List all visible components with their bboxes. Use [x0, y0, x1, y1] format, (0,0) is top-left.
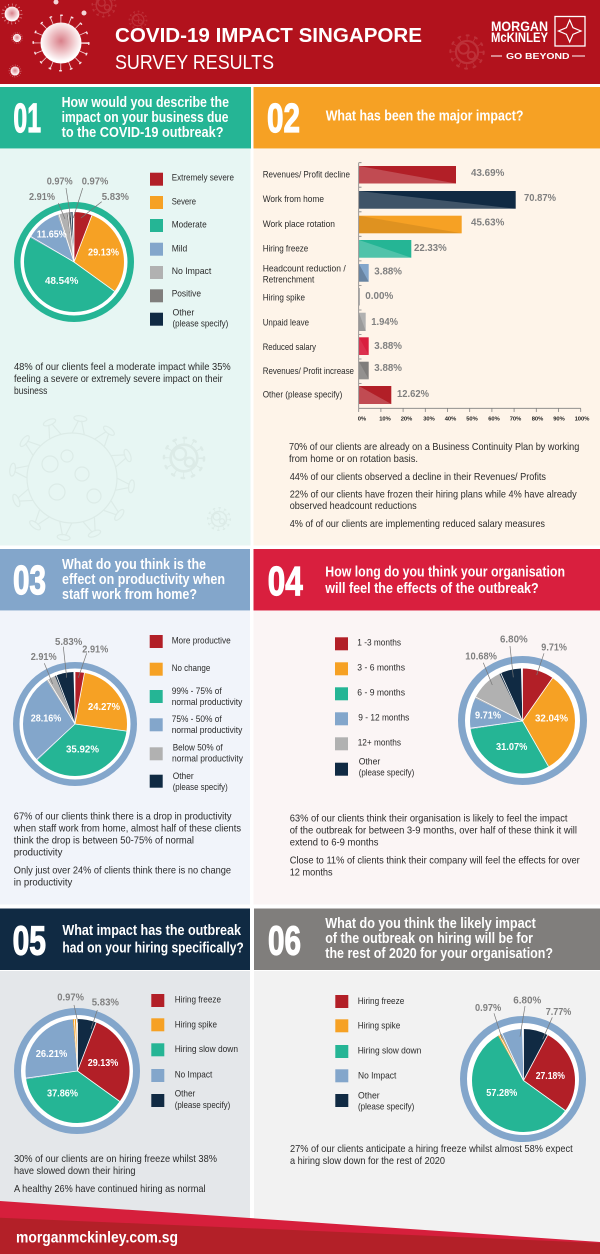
legend 05: Other — [175, 1089, 195, 1099]
axis labels: 10% — [379, 417, 391, 423]
heading bar 04: How long do you think your organisation — [325, 565, 565, 581]
axis labels: 60% — [488, 417, 500, 423]
axis labels: 90% — [553, 417, 565, 423]
legend 04: Other — [359, 756, 380, 766]
pie chart 04: 6.80% — [500, 635, 528, 646]
text block 01: feeling a severe or extremely severe impact on their — [14, 374, 223, 385]
text block 04: 12 months — [290, 868, 333, 879]
icon: dot virus right — [82, 10, 86, 16]
legend 04 — [335, 637, 414, 778]
heading bar 04 — [254, 549, 600, 610]
pie chart 04 — [462, 635, 584, 782]
axis labels: 80% — [532, 417, 543, 423]
heading bar 05: 05 — [13, 917, 46, 963]
text block 06: a hiring slow down for the rest of 2020 — [290, 1156, 445, 1167]
axis labels: 0% — [358, 417, 366, 423]
footer band — [0, 1201, 600, 1254]
pie chart 06: 27.18% — [536, 1071, 565, 1082]
category labels: Unpaid leave — [263, 318, 309, 328]
pie chart 03: 35.92% — [66, 745, 99, 756]
value labels: 3.88% — [374, 267, 402, 278]
heading bar 06: 06 — [268, 917, 301, 963]
bar chart 02 — [263, 163, 589, 423]
pie chart 05: 29.13% — [88, 1058, 118, 1069]
legend 01: Mild — [172, 243, 187, 253]
legend 03: (please specify) — [173, 782, 228, 792]
text block 04: Close to 11% of clients think their company will feel the effects for over — [290, 856, 580, 867]
heading bar 01: impact on your business due — [62, 110, 228, 126]
category labels: Revenues/ Profit decline — [263, 169, 350, 179]
legend 03: normal productivity — [172, 754, 243, 764]
legend 05: (please specify) — [175, 1100, 230, 1110]
value labels: 45.63% — [471, 218, 504, 229]
pie chart 05: 5.83% — [92, 998, 119, 1009]
text block 03: 67% of our clients think there is a drop in productivity — [14, 811, 232, 822]
legend 03: 75% - 50% of — [172, 714, 222, 724]
pie chart 06: 6.80% — [513, 995, 541, 1006]
category labels: Work from home — [263, 194, 324, 204]
text block 02: 44% of our clients observed a decline in their Revenues/ Profits — [290, 472, 546, 483]
pie chart 05: 0.97% — [57, 993, 84, 1004]
pie chart 01: 29.13% — [88, 248, 119, 259]
text block 06: 27% of our clients anticipate a hiring freeze whilst almost 58% expect — [290, 1144, 573, 1155]
text block 02: from home or on rotation basis. — [289, 454, 418, 465]
axis labels: 100% — [575, 417, 589, 423]
legend 05 — [151, 994, 238, 1110]
pie chart 06: 7.77% — [546, 1007, 571, 1018]
logo: Morgan McKinley: GO BEYOND — [506, 52, 570, 61]
legend 03: 99% - 75% of — [172, 686, 222, 696]
pie chart 01: 48.54% — [45, 276, 78, 287]
heading bar 02: 02 — [267, 95, 300, 141]
axis labels: 30% — [423, 417, 435, 423]
text block 02: 22% of our clients have frozen their hiring plans while 4% have already — [290, 489, 578, 500]
value labels: 43.69% — [471, 168, 504, 179]
text block 01 — [14, 362, 231, 397]
heading bar 02: What has been the major impact? — [326, 109, 524, 125]
pie chart 01: 5.83% — [102, 192, 129, 203]
text block 05: 30% of our clients are on hiring freeze whilst 38% — [14, 1154, 217, 1165]
legend 01: Moderate — [172, 220, 207, 230]
heading bar 06: the rest of 2020 for your organisation? — [325, 946, 553, 962]
pie chart 01: 2.91% — [29, 192, 55, 203]
legend 01: Extremely severe — [172, 173, 234, 183]
heading bar 05 — [0, 908, 250, 970]
text block 01: 48% of our clients feel a moderate impact while 35% — [14, 362, 231, 373]
value labels: 3.88% — [374, 341, 402, 352]
heading bar 03: What do you think is the — [62, 557, 206, 573]
text block 03: when staff work from home, almost half of these clients — [13, 823, 241, 834]
logo: Morgan McKinley: McKINLEY — [491, 29, 549, 45]
pie chart 01 — [17, 177, 131, 319]
axis labels — [358, 417, 589, 423]
pie chart 03: 2.91% — [31, 652, 57, 663]
pie chart 03: 24.27% — [88, 702, 120, 713]
heading bar 01 — [0, 87, 251, 148]
text block 03: productivity — [14, 848, 63, 859]
heading bar 01: How would you describe the — [62, 95, 229, 111]
header banner — [0, 0, 600, 84]
value labels: 22.33% — [414, 243, 447, 254]
legend 05: Hiring freeze — [175, 995, 221, 1005]
legend 04: 9 - 12 months — [358, 713, 410, 723]
icon: dot virus top — [54, 0, 58, 4]
legend 04: 3 - 6 months — [357, 663, 405, 673]
pie chart 01: 11.65% — [37, 229, 67, 240]
heading bar 06: of the outbreak on hiring will be for — [325, 931, 533, 947]
category labels: Headcount reduction / — [263, 264, 346, 274]
legend 04: 6 - 9 months — [357, 688, 405, 698]
category labels: Other (please specify) — [263, 390, 342, 400]
category labels — [263, 169, 354, 400]
icon: faint virus top — [92, 0, 116, 17]
legend 05: Hiring spike — [175, 1019, 217, 1029]
legend 03: Below 50% of — [173, 743, 223, 753]
legend 06: Hiring slow down — [358, 1045, 421, 1055]
value labels: 70.87% — [524, 193, 556, 204]
text block 03: think the drop is between 50-75% of normal — [14, 835, 194, 846]
title: COVID-19 IMPACT SINGAPORE — [115, 25, 422, 47]
heading bar 03 — [0, 549, 250, 610]
legend 03: Other — [173, 771, 194, 781]
heading bar 06: What do you think the likely impact — [325, 916, 536, 932]
pie chart 04: 10.68% — [465, 651, 497, 662]
text block 02: observed headcount reductions — [290, 501, 417, 512]
legend 06 — [335, 995, 421, 1111]
category labels: Reduced salary — [263, 342, 316, 352]
pie chart 03 — [16, 637, 134, 783]
heading bar 01: to the COVID-19 outbreak? — [62, 125, 223, 141]
text block 05: have slowed down their hiring — [14, 1166, 136, 1177]
legend 01 — [150, 173, 234, 329]
text block 05 — [14, 1154, 217, 1195]
legend 06: (please specify) — [358, 1101, 414, 1111]
axis labels: 50% — [466, 417, 478, 423]
legend 03 — [150, 635, 243, 792]
text block 03: Only just over 24% of clients think there is no change — [14, 866, 231, 877]
category labels: Work place rotation — [263, 219, 335, 229]
text block 04: of the outbreak for between 3-9 months, over half of these think it will — [290, 826, 577, 837]
heading bar 04: 04 — [268, 558, 303, 604]
heading bar 05: had on your hiring specifically? — [62, 940, 244, 956]
legend 05: Hiring slow down — [175, 1044, 238, 1054]
heading bar 03: effect on productivity when — [62, 572, 225, 588]
panel: 06 rest of 2020 — [254, 908, 600, 1246]
pie chart 01: 0.97% — [47, 177, 73, 188]
heading bar 04: will feel the effects of the outbreak? — [324, 581, 539, 597]
category labels: Revenues/ Profit increase — [263, 366, 354, 376]
subtitle: SURVEY RESULTS — [115, 52, 274, 74]
pie chart 04: 31.07% — [496, 742, 527, 753]
legend 03: No change — [172, 663, 210, 673]
pie chart 03: 5.83% — [55, 637, 82, 648]
heading bar 03: staff work from home? — [62, 587, 197, 603]
pie chart 03: 28.16% — [31, 714, 61, 725]
pie chart 05 — [18, 993, 136, 1130]
legend 06: No Impact — [358, 1070, 397, 1080]
panel: 02 major impact — [254, 87, 600, 546]
legend 06: Hiring freeze — [358, 996, 404, 1006]
legend 01: Severe — [172, 196, 196, 206]
icon: faint virus right — [450, 35, 484, 69]
value labels: 1.94% — [371, 317, 398, 328]
logo: Morgan McKinley — [491, 16, 585, 61]
panel: 01 business impact — [0, 87, 251, 546]
value labels: 12.62% — [397, 389, 429, 400]
legend 06: Other — [358, 1090, 380, 1100]
text block 06 — [290, 1144, 573, 1167]
heading bar 06 — [254, 908, 600, 970]
text block 02: 4% of of our clients are implementing reduced salary measures — [290, 519, 545, 530]
legend 06: Hiring spike — [358, 1020, 400, 1030]
decorative virus tiny — [208, 508, 230, 530]
text block 03: in productivity — [14, 878, 73, 889]
legend 03: normal productivity — [172, 725, 243, 735]
legend 05: No Impact — [175, 1070, 213, 1080]
legend 01: Other — [172, 308, 194, 318]
icon: main virus — [33, 15, 89, 71]
text block 04 — [290, 814, 580, 879]
axis labels: 70% — [510, 417, 521, 423]
legend 01: Positive — [172, 289, 201, 299]
bars — [359, 166, 516, 404]
value labels: 0.00% — [365, 291, 393, 302]
axis labels: 40% — [445, 417, 456, 423]
pie chart 04: 32.04% — [535, 714, 568, 725]
heading bar 01: 01 — [13, 95, 41, 141]
panel: 03 productivity — [0, 549, 250, 904]
legend 04: 1 -3 months — [357, 638, 401, 648]
pie chart 04: 9.71% — [475, 711, 501, 722]
heading bar 02 — [254, 87, 600, 148]
pie chart 04: 9.71% — [541, 643, 567, 654]
decorative virus outline large — [9, 415, 135, 541]
pie chart 01: 0.97% — [82, 177, 108, 188]
category labels: Retrenchment — [263, 275, 315, 285]
pie chart 03: 2.91% — [82, 645, 108, 656]
value labels — [365, 168, 556, 400]
legend 01: No Impact — [172, 266, 212, 276]
text block 02 — [289, 442, 580, 530]
pie chart 06: 57.28% — [486, 1088, 517, 1099]
heading bar 03: 03 — [13, 557, 46, 603]
pie chart 05: 26.21% — [36, 1049, 67, 1060]
text block 04: 63% of our clients think their organisation is likely to feel the impact — [290, 814, 568, 825]
pie chart 05: 37.86% — [47, 1089, 78, 1100]
text block 01: business — [14, 386, 47, 397]
icon: faint virus mid — [129, 11, 147, 29]
axis labels: 20% — [401, 417, 412, 423]
icon: small virus top left — [2, 4, 22, 24]
text block 05: A healthy 26% have continued hiring as normal — [14, 1184, 206, 1195]
footer website: morganmckinley.com.sg — [16, 1230, 178, 1247]
pie chart 06: 0.97% — [475, 1003, 501, 1014]
panel: 05 hiring impact — [0, 908, 250, 1231]
heading bar 05: What impact has the outbreak — [62, 923, 242, 939]
legend 04: (please specify) — [359, 768, 414, 778]
category labels: Hiring spike — [263, 293, 305, 303]
text block 04: extend to 6-9 months — [290, 838, 378, 849]
value labels: 3.88% — [374, 363, 402, 374]
icon: small virus bottom left — [9, 65, 21, 77]
decorative virus small — [164, 438, 204, 478]
legend 01: (please specify) — [172, 319, 228, 329]
panel: 04 duration — [254, 549, 600, 904]
text block 03 — [13, 811, 241, 889]
legend 04: 12+ months — [358, 738, 401, 748]
icon: small virus middle left — [11, 32, 23, 44]
category labels: Hiring freeze — [263, 244, 308, 254]
legend 03: normal productivity — [172, 697, 243, 707]
legend 03: More productive — [172, 636, 231, 646]
pie chart 06 — [464, 995, 582, 1138]
logo: Morgan McKinley: MORGAN — [491, 18, 548, 34]
